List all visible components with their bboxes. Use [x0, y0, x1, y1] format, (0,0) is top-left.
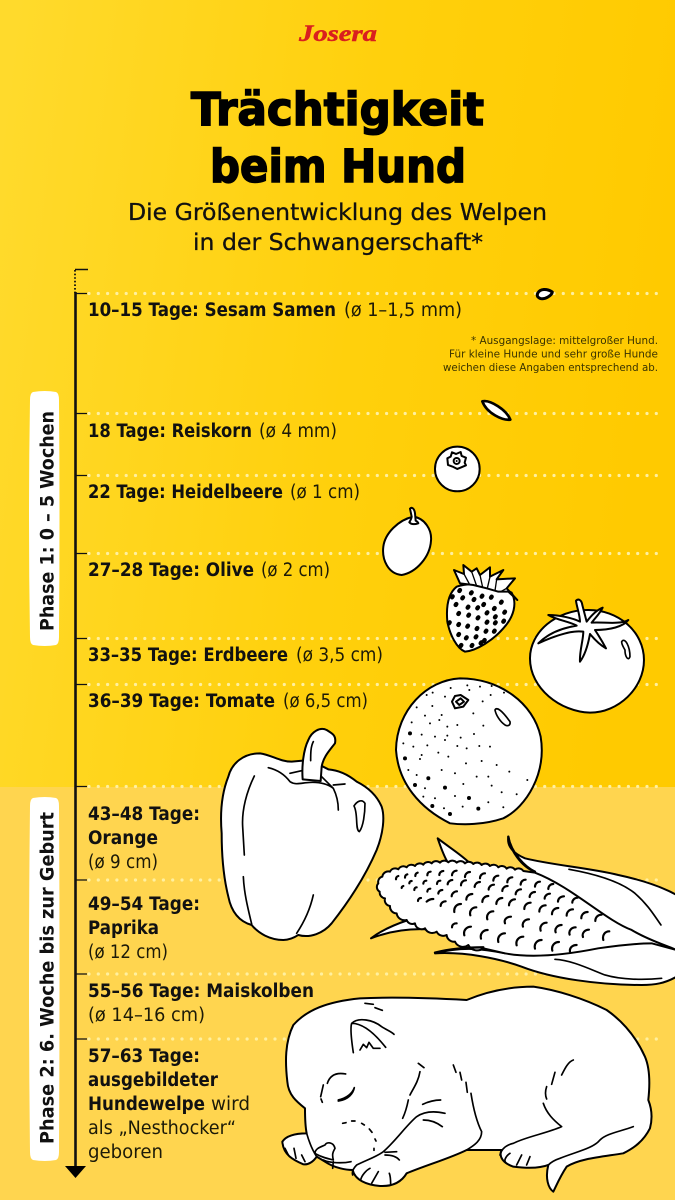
label: blueberry: (ø 1 cm) [290, 482, 360, 503]
label: blueberry: 22 Tage: Heidelbeere [88, 482, 283, 503]
footnote: Für kleine Hunde und sehr große Hunde [449, 348, 658, 360]
label: orange: Orange [88, 828, 158, 849]
label: rice: (ø 4 mm) [259, 421, 337, 442]
phase 1 pill [29, 391, 60, 646]
icon: strawberry [447, 565, 517, 652]
footnote: * Ausgangslage: mittelgroßer Hund. [471, 335, 658, 347]
label: olive: 27–28 Tage: Olive [88, 560, 254, 581]
label: tomato: (ø 6,5 cm) [283, 691, 368, 712]
label: olive: (ø 2 cm) [261, 560, 330, 581]
background: upper panel, phase 1 [0, 0, 675, 787]
title [191, 83, 484, 193]
label: puppy: 57–63 Tage: [88, 1046, 200, 1067]
label: orange [88, 804, 200, 873]
title: beim Hund [210, 140, 466, 193]
label: orange: 43–48 Tage: [88, 804, 200, 825]
phase 2 pill [29, 797, 60, 1161]
label: rice: 18 Tage: Reiskorn [88, 421, 252, 442]
label: sesame: (ø 1–1,5 mm) [344, 300, 462, 321]
icon: sleeping puppy [282, 987, 651, 1192]
label: corn cob: 55–56 Tage: Maiskolben [88, 981, 314, 1002]
subtitle: in der Schwangerschaft* [193, 230, 483, 256]
label: puppy: geboren [88, 1142, 163, 1163]
icon: blueberry [435, 447, 480, 491]
label: tomato: 36–39 Tage: Tomate [88, 691, 275, 712]
icon: orange [396, 678, 542, 824]
subtitle [128, 200, 547, 256]
label: bell pepper: 49–54 Tage: [88, 894, 200, 915]
label: corn cob [88, 981, 314, 1026]
label: puppy [88, 1046, 250, 1163]
subtitle: Die Größenentwicklung des Welpen [128, 200, 547, 226]
footnote: weichen diese Angaben entsprechend ab. [443, 362, 658, 374]
label: strawberry: 33–35 Tage: Erdbeere [88, 645, 288, 666]
dotted size guide lines [89, 294, 663, 1039]
label: orange: (ø 9 cm) [88, 852, 158, 873]
label: corn cob: (ø 14–16 cm) [88, 1005, 205, 1026]
label: bell pepper [88, 894, 200, 963]
footnote [443, 335, 658, 374]
logo: Josera: Josera [298, 21, 377, 46]
title: Trächtigkeit [191, 83, 484, 136]
icon: sesame seed [537, 290, 552, 299]
label: puppy: wird [211, 1094, 250, 1115]
label: strawberry: (ø 3,5 cm) [296, 645, 383, 666]
label: puppy: Hundewelpe [88, 1094, 205, 1115]
timeline axis with ticks and arrow [65, 270, 88, 1178]
phase 2 pill: Phase 2: 6. Woche bis zur Geburt [36, 812, 58, 1144]
icon: tomato [530, 600, 644, 713]
label: bell pepper: Paprika [88, 918, 159, 939]
background: lower panel, phase 2 [0, 787, 675, 1200]
label: bell pepper: (ø 12 cm) [88, 942, 168, 963]
icon: bell pepper [221, 729, 383, 940]
label: sesame: 10–15 Tage: Sesam Samen [88, 300, 336, 321]
icon: olive [383, 508, 431, 575]
label: puppy: ausgebildeter [88, 1070, 218, 1091]
icon: corn cob [371, 837, 675, 985]
label: puppy: als „Nesthocker“ [88, 1118, 236, 1139]
icon: rice grain [482, 401, 510, 420]
phase 1 pill: Phase 1: 0 – 5 Wochen [36, 411, 58, 631]
